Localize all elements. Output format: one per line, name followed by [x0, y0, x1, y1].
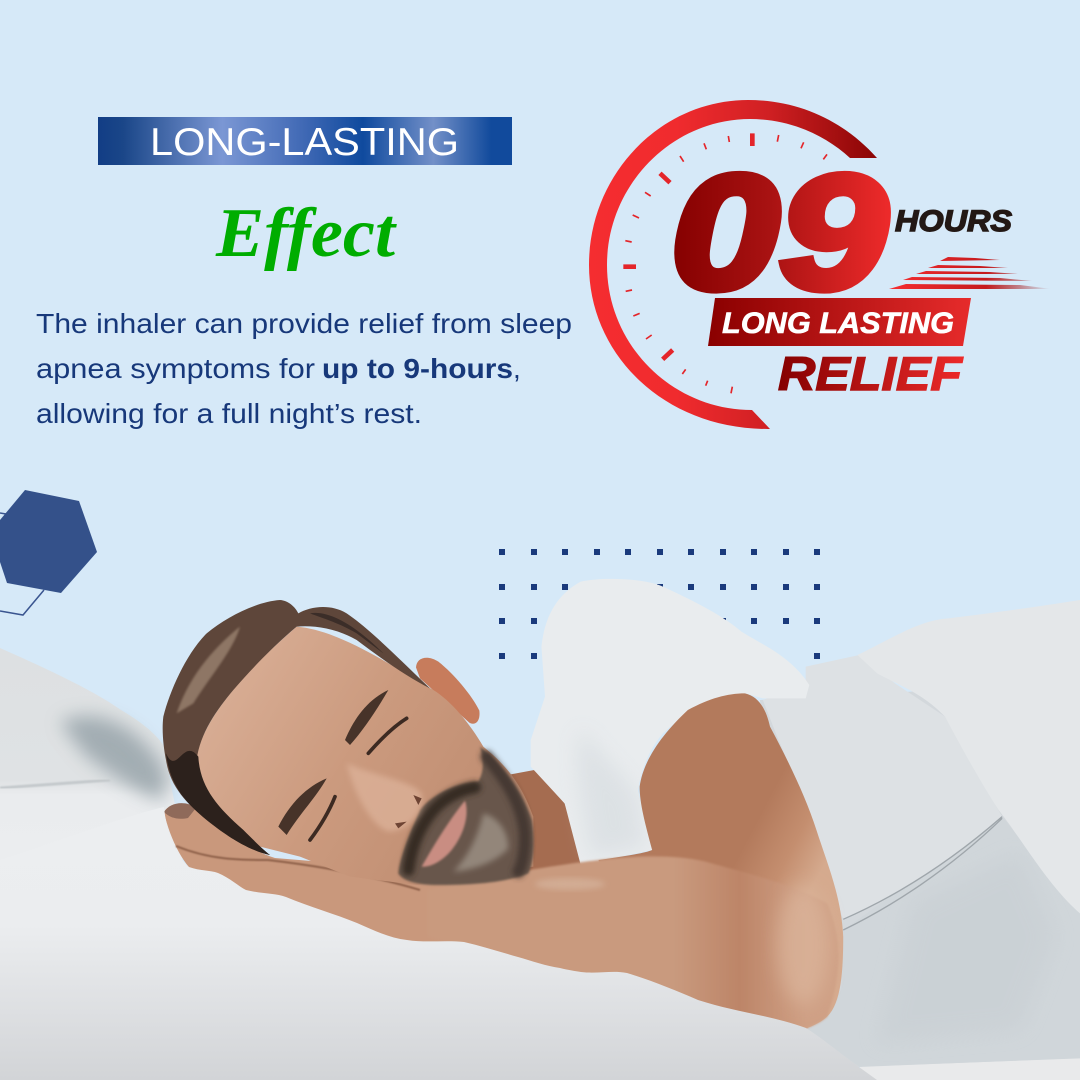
number 09: 09: [671, 142, 887, 323]
heading: Effect: Effect: [215, 195, 398, 272]
neck: [499, 770, 581, 880]
chin grey patch: [453, 813, 508, 872]
right pillow: [857, 600, 1080, 913]
nostril shadow: [395, 795, 422, 828]
illustration: man sleeping on white bedding: [0, 579, 1080, 1080]
head and face: [163, 600, 533, 885]
band label: LONG LASTING: [722, 307, 954, 340]
upper eyebrow: [345, 690, 388, 745]
relief band: [708, 298, 971, 346]
lower eye: [310, 797, 335, 840]
heading banner: long-lasting: [98, 117, 512, 165]
sheet at bottom right: [860, 1058, 1080, 1080]
left forearm and hand: [164, 803, 560, 965]
label: hours: HOURS: [895, 205, 1012, 238]
body text: The inhaler can provide relief from sleep: [36, 308, 572, 339]
nose: [347, 763, 422, 832]
body text: apnea symptoms for: [36, 353, 315, 384]
front blanket: [0, 807, 877, 1080]
upper eye: [368, 718, 407, 753]
face skin: [196, 627, 533, 885]
hair shadow: [166, 751, 270, 855]
sleeve shadow: [578, 727, 645, 857]
decorative hexagons: [0, 490, 97, 615]
body backing: [760, 690, 1080, 1067]
shirt sleeve: [531, 579, 809, 865]
elbow highlight: [777, 885, 829, 1005]
right upper arm: [599, 693, 843, 1037]
gauge ticks: [623, 133, 827, 393]
beard: [398, 747, 533, 885]
body text: [36, 308, 572, 429]
forearm: [427, 856, 839, 1037]
heading banner: long-lasting: LONG-LASTING: [150, 121, 459, 164]
badge: 09 hours long lasting relief: [589, 100, 1052, 429]
lower eyebrow: [278, 778, 327, 835]
jaw shade: [487, 757, 525, 872]
speed lines: [889, 257, 1052, 289]
ear: [416, 658, 480, 724]
hair highlight: [177, 627, 240, 713]
upper torso in shirt: [763, 655, 1002, 919]
back pillow: [0, 648, 200, 1080]
mustache: [408, 787, 475, 870]
gauge arc: [589, 100, 877, 429]
dot grid: [499, 549, 820, 659]
lips: [422, 801, 467, 867]
body text: allowing for a full night’s rest.: [36, 398, 422, 429]
shirt crease: [843, 817, 1002, 930]
hair top shadow: [310, 613, 383, 653]
grey shirt lower body: [806, 817, 1080, 1067]
body text: ,: [513, 353, 521, 384]
forearm highlight: [535, 878, 605, 890]
body text: up to 9-hours: [322, 353, 513, 384]
hair: [163, 600, 430, 855]
relief word: RELIEF: [778, 347, 963, 400]
